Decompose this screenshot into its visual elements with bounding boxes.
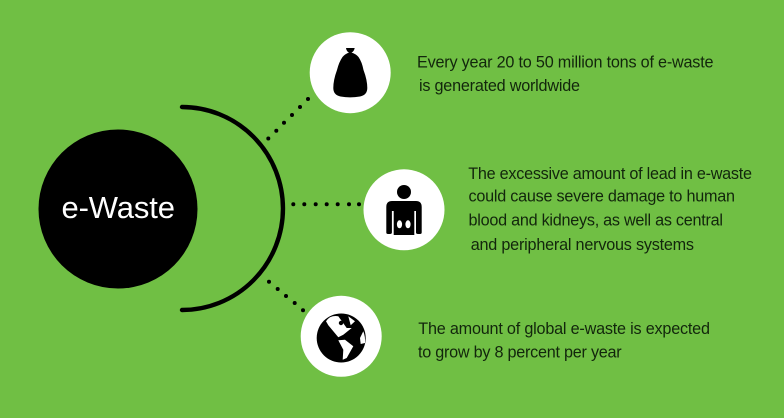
text: e-waste generated: Every year 20 to 50 million tons of e-waste bbox=[417, 54, 714, 72]
icon: globe bbox=[301, 296, 382, 377]
icon: human body with kidneys bbox=[364, 169, 444, 250]
text: growth per year: to grow by 8 percent per year bbox=[418, 344, 622, 362]
central circle: e-Waste bbox=[38, 130, 198, 288]
text: growth per year: The amount of global e-waste is expected bbox=[418, 320, 710, 338]
text: lead damage bbox=[468, 165, 752, 254]
dotted connector: top bbox=[266, 97, 310, 140]
text: lead damage: The excessive amount of lead in e-waste bbox=[468, 165, 752, 183]
text: lead damage: could cause severe damage to human bbox=[468, 188, 735, 206]
dotted connector: bottom bbox=[267, 280, 305, 312]
semicircular arc bbox=[182, 107, 283, 310]
dotted connector: middle bbox=[291, 202, 361, 206]
text: lead damage: and peripheral nervous systems bbox=[471, 236, 694, 254]
text: e-waste generated bbox=[417, 54, 714, 95]
icon: garbage bag bbox=[310, 32, 391, 113]
text: growth per year bbox=[418, 320, 710, 362]
text: lead damage: blood and kidneys, as well as central bbox=[468, 212, 723, 230]
text: e-waste generated: is generated worldwide bbox=[419, 77, 580, 95]
central circle: e-Waste: e-Waste bbox=[62, 190, 175, 225]
